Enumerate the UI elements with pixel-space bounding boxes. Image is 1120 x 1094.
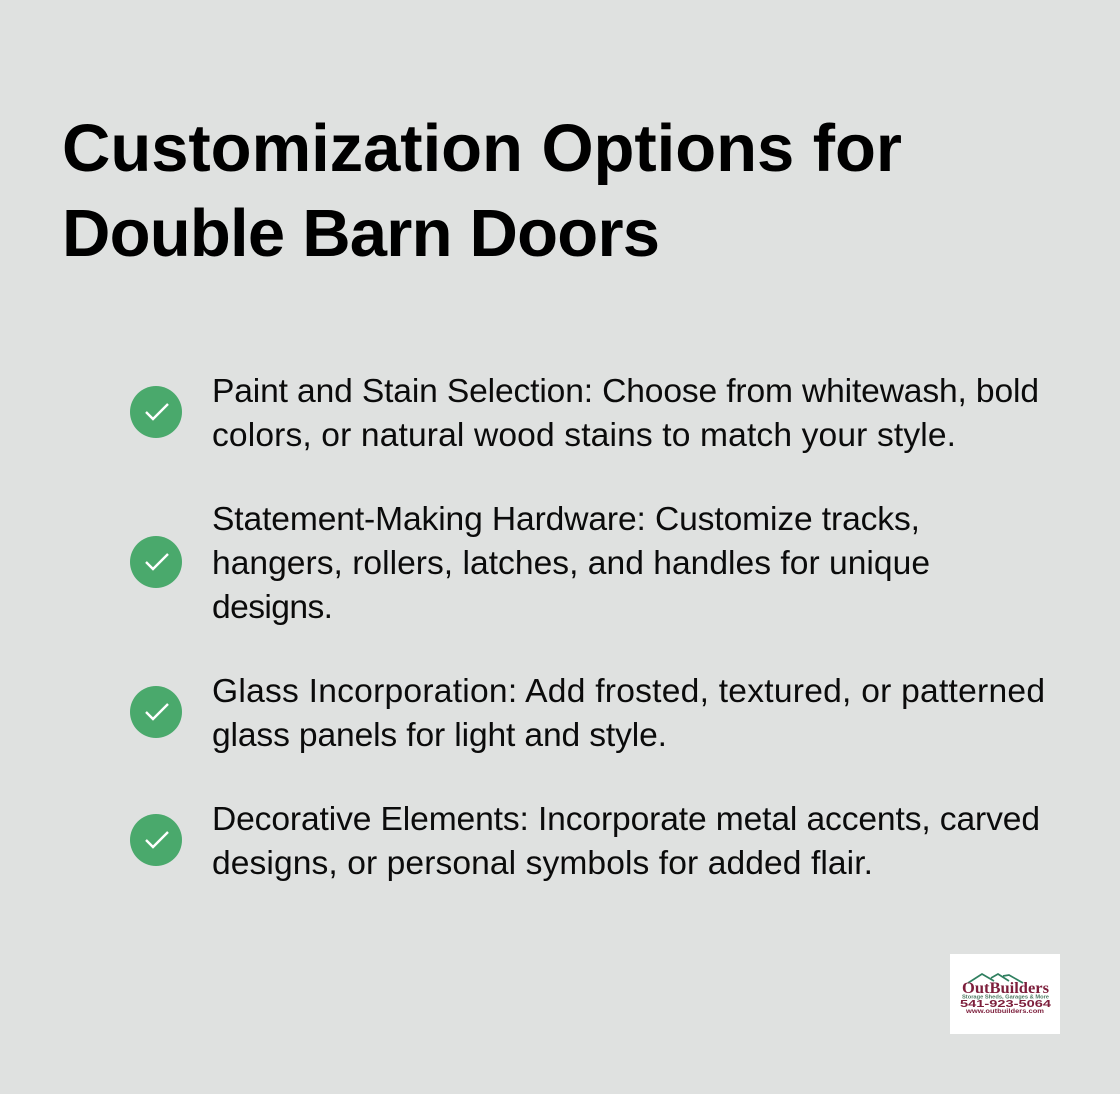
text: decorative: designs, or personal symbols for added flair. xyxy=(212,845,873,882)
text: decorative xyxy=(212,801,1040,882)
logo xyxy=(950,954,1060,1034)
icon: check circle xyxy=(130,686,182,738)
text: glass: Glass Incorporation: Add frosted, textured, or patterned xyxy=(212,673,1045,710)
text: paint and stain: Paint and Stain Selection: Choose from whitewash, bold xyxy=(212,373,1039,410)
text: paint and stain: colors, or natural wood stains to match your style. xyxy=(212,417,956,454)
list item: decorative xyxy=(130,801,1040,882)
list item: paint and stain xyxy=(130,373,1039,454)
logo name: OutBuilders xyxy=(962,980,1049,997)
text: decorative: Decorative Elements: Incorporate metal accents, carved xyxy=(212,801,1040,838)
text: paint and stain xyxy=(212,373,1039,454)
title xyxy=(62,111,902,271)
icon: check circle xyxy=(130,536,182,588)
logo phone: 541-923-5064 xyxy=(960,999,1052,1010)
text: glass xyxy=(212,673,1045,754)
text: hardware: designs. xyxy=(212,589,333,626)
list item: hardware xyxy=(130,501,930,626)
text: hardware xyxy=(212,501,930,626)
title: Double Barn Doors xyxy=(62,196,660,271)
icon: check circle xyxy=(130,386,182,438)
text: hardware: hangers, rollers, latches, and handles for unique xyxy=(212,545,930,582)
logo url: www.outbuilders.com xyxy=(965,1008,1044,1015)
icon: roofline xyxy=(968,974,1023,983)
list item: glass xyxy=(130,673,1045,754)
logo tagline: Storage Sheds, Garages & More xyxy=(962,994,1049,1000)
text: hardware: Statement-Making Hardware: Customize tracks, xyxy=(212,501,920,538)
text: glass: glass panels for light and style. xyxy=(212,717,667,754)
title: Customization Options for xyxy=(62,111,902,186)
icon: check circle xyxy=(130,814,182,866)
